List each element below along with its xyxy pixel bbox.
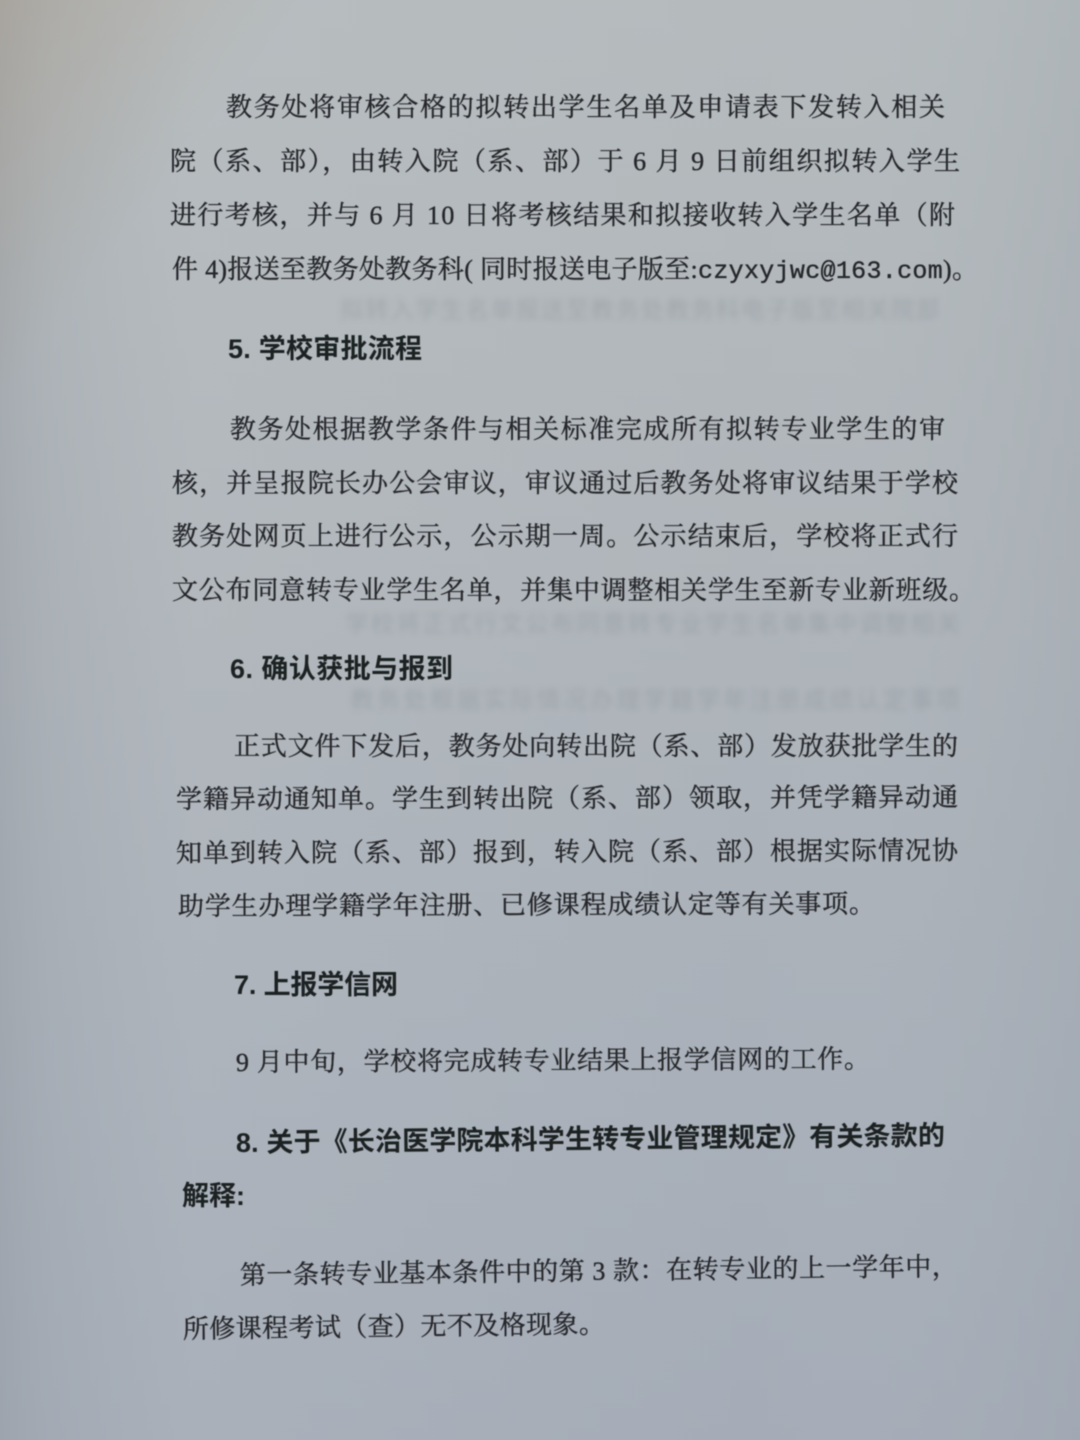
paragraph: confirmation and registration: 正式文件下发后，教务处向转出院（系、部）发放获批学生的 — [234, 732, 958, 761]
paragraph: confirmation and registration: 助学生办理学籍学年注册、已修课程成绩认定等有关事项。 — [178, 890, 875, 921]
paragraph: notice of transfer-in assessment: 进行考核，并与 6 月 10 日将考核结果和拟接收转入学生名单（附 — [170, 201, 955, 230]
heading 7: 7. 上报学信网 — [234, 970, 398, 1000]
heading 8: 8. 关于《长治医学院本科学生转专业管理规定》有关条款的 — [236, 1121, 945, 1158]
heading 8: 解释: — [182, 1181, 245, 1211]
paragraph: school approval process: 教务处网页上进行公示，公示期一周。公示结束后，学校将正式行 — [172, 522, 958, 551]
show-through text from reverse side: 拟转入学生名单报送至教务处教务科电子版至相关院部 — [340, 297, 940, 324]
paragraph: report to CHSI: 9 月中旬，学校将完成转专业结果上报学信网的工作。 — [236, 1045, 870, 1077]
show-through text from reverse side: 教务处根据实际情况办理学籍学年注册成绩认定事项 — [350, 687, 960, 714]
paragraph: school approval process — [172, 415, 975, 605]
paragraph: interpretation of clause: 所修课程考试（查）无不及格现象。 — [183, 1310, 605, 1344]
heading 6: 6. 确认获批与报到 — [230, 654, 453, 684]
paragraph: school approval process: 核，并呈报院长办公会审议，审议通过后教务处将审议结果于学校 — [172, 469, 959, 498]
heading 5: 5. 学校审批流程 — [228, 334, 422, 364]
paragraph: interpretation of clause: 第一条转专业基本条件中的第 3 款：在转专业的上一学年中， — [240, 1252, 958, 1290]
document body text — [170, 93, 978, 1344]
paragraph: notice of transfer-in assessment: 教务处将审核合格的拟转出学生名单及申请表下发转入相关 — [226, 93, 945, 122]
paragraph: notice of transfer-in assessment: 件 4)报送至教务处教务科( 同时报送电子版至:czyxyjwc@163.com)。 — [172, 255, 978, 286]
paragraph: school approval process: 教务处根据教学条件与相关标准完成所有拟转专业学生的审 — [230, 415, 945, 444]
paragraph: confirmation and registration: 知单到转入院（系、部）报到，转入院（系、部）根据实际情况协 — [176, 836, 959, 868]
heading 8 — [182, 1121, 945, 1211]
paragraph: school approval process: 文公布同意转专业学生名单，并集中调整相关学生至新专业新班级。 — [172, 576, 975, 605]
paragraph: confirmation and registration: 学籍异动通知单。学生到转出院（系、部）领取，并凭学籍异动通 — [176, 783, 958, 814]
paragraph: notice of transfer-in assessment: 院（系、部），由转入院（系、部）于 6 月 9 日前组织拟转入学生 — [170, 147, 960, 176]
show-through text from reverse side: 学校将正式行文公布同意转专业学生名单集中调整相关 — [345, 611, 960, 638]
show-through text from reverse side — [340, 297, 960, 714]
paragraph: notice of transfer-in assessment — [170, 93, 978, 286]
paragraph: interpretation of clause — [183, 1252, 958, 1344]
paragraph: confirmation and registration — [176, 732, 959, 921]
